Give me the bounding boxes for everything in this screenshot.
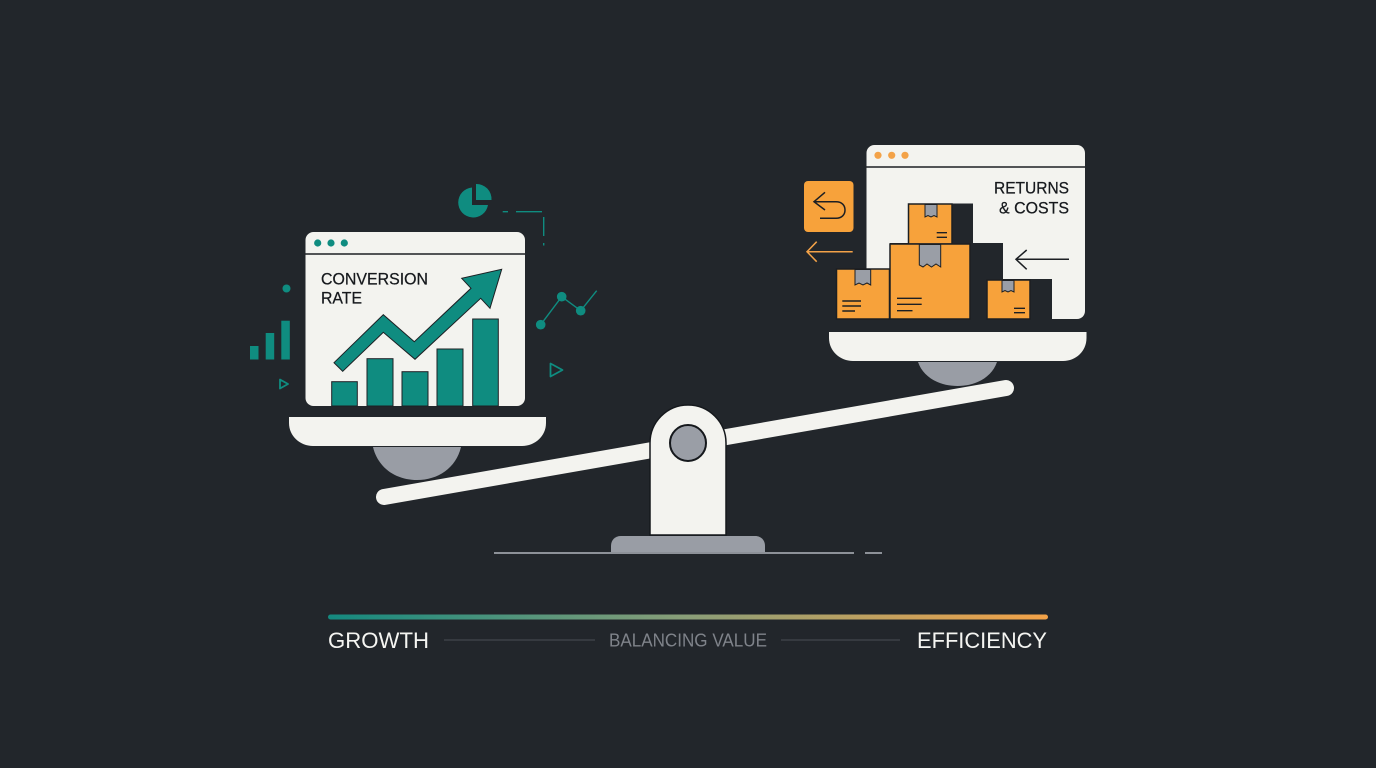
icon: large play triangle xyxy=(550,364,562,376)
heading: returns and costs: & COSTS xyxy=(999,198,1069,218)
box: left xyxy=(836,269,890,319)
label: balancing value: BALANCING VALUE xyxy=(609,630,767,650)
window body with stacked box cutout xyxy=(866,145,1085,319)
box: large xyxy=(890,244,970,319)
left tray xyxy=(289,417,546,446)
panel: conversion rate window xyxy=(306,232,525,406)
heading: conversion rate: RATE xyxy=(321,288,362,308)
growth arrow xyxy=(334,269,502,371)
fulcrum base xyxy=(611,536,765,553)
icon: line chart xyxy=(536,291,597,330)
left pan support xyxy=(373,447,461,480)
window title bar divider xyxy=(306,253,525,255)
box: top xyxy=(908,204,952,244)
window body xyxy=(306,232,525,406)
window title bar divider xyxy=(866,166,1085,168)
heading: returns and costs: RETURNS xyxy=(994,178,1069,198)
icon: mini bars xyxy=(250,321,290,360)
right tray xyxy=(829,332,1086,361)
growth to efficiency spectrum xyxy=(328,614,1048,653)
divider left xyxy=(444,639,595,641)
label: efficiency: EFFICIENCY xyxy=(917,628,1047,653)
fulcrum xyxy=(494,405,882,553)
ground line xyxy=(494,552,854,554)
icon: teal dot xyxy=(282,284,290,292)
icon: pie chart xyxy=(458,184,492,217)
window dots xyxy=(874,152,909,159)
decorative bracket lines xyxy=(503,212,544,246)
gradient bar xyxy=(328,614,1048,620)
icon: small play triangle xyxy=(280,380,288,388)
icon: return arrow badge xyxy=(804,181,854,232)
fulcrum post xyxy=(650,405,726,535)
arrow: orange left xyxy=(807,242,853,262)
seesaw beam xyxy=(384,388,1006,497)
fulcrum pivot xyxy=(670,425,706,461)
heading: conversion rate: CONVERSION xyxy=(321,270,428,288)
bar chart xyxy=(332,319,498,406)
label: growth: GROWTH xyxy=(328,628,429,653)
box: small right xyxy=(987,280,1030,319)
ground dash xyxy=(865,552,882,554)
right pan support xyxy=(918,362,997,386)
window dots xyxy=(314,239,348,247)
arrow: pointing left inside window xyxy=(1016,250,1069,269)
divider right xyxy=(781,639,900,641)
panel: returns and costs window xyxy=(836,145,1085,319)
